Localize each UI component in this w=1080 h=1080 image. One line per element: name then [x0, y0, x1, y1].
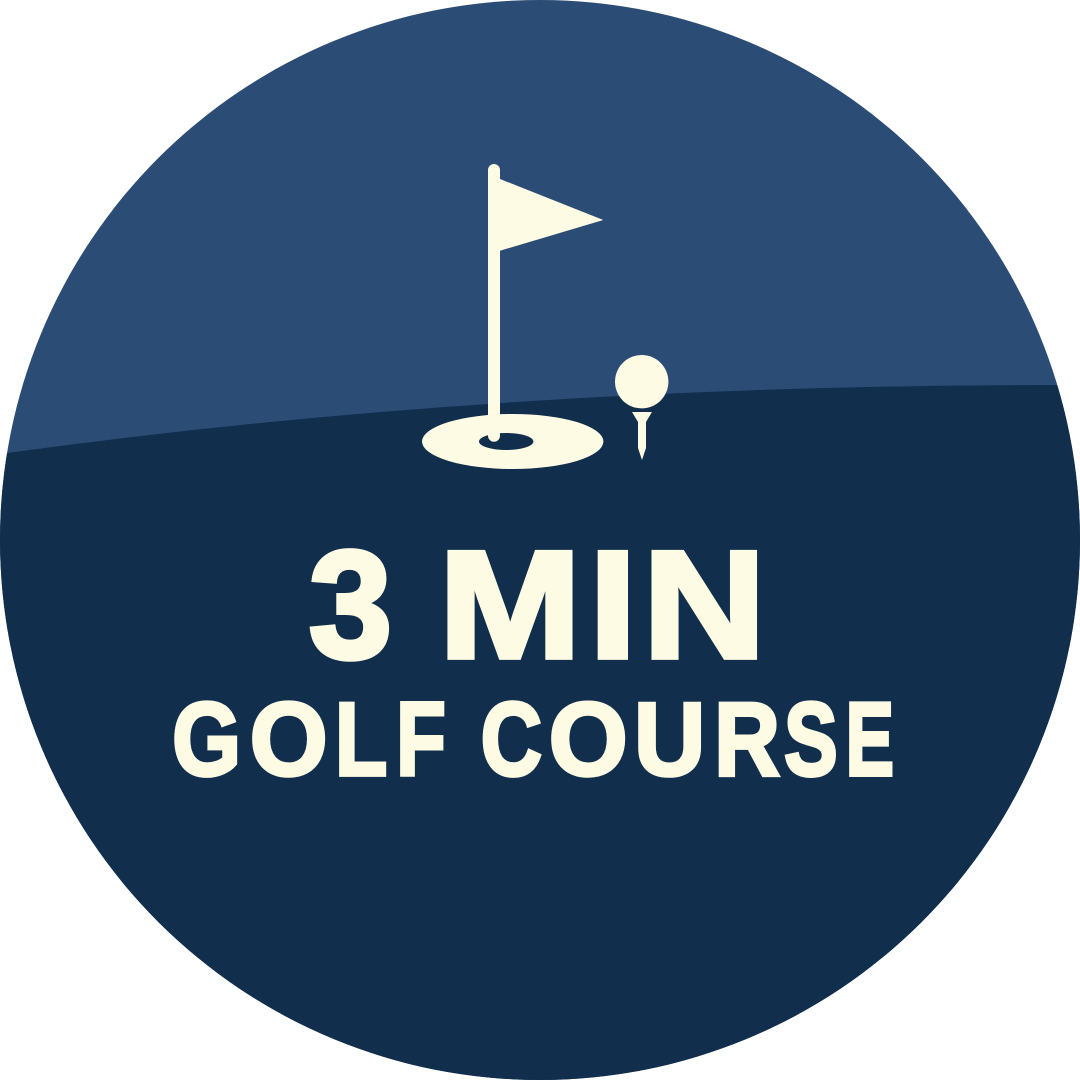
golf ball — [615, 355, 668, 408]
subtitle: GOLF COURSE: U — [634, 681, 705, 797]
subtitle: GOLF COURSE: O — [250, 681, 328, 797]
title: 3 MIN — [309, 519, 766, 691]
title: 3 MIN: 3 — [309, 520, 392, 691]
subtitle: GOLF COURSE: F — [396, 681, 446, 797]
subtitle: GOLF COURSE: S — [784, 681, 838, 797]
subtitle: GOLF COURSE: G — [172, 682, 241, 797]
tee — [632, 412, 652, 460]
flag pole and pennant — [488, 164, 603, 442]
putting green with hole — [422, 414, 603, 469]
subtitle: GOLF COURSE — [172, 681, 894, 798]
subtitle: GOLF COURSE: O — [549, 681, 628, 797]
title: 3 MIN: M — [439, 520, 581, 690]
subtitle: GOLF COURSE: C — [481, 682, 542, 798]
title: 3 MIN: N — [643, 520, 766, 691]
icon: golf hole with flag — [422, 164, 603, 469]
title: 3 MIN: I — [589, 519, 637, 690]
icon: golf ball on tee — [615, 355, 668, 460]
subtitle: GOLF COURSE: E — [846, 681, 894, 797]
subtitle: GOLF COURSE: L — [335, 682, 387, 798]
subtitle: GOLF COURSE: R — [714, 681, 780, 797]
